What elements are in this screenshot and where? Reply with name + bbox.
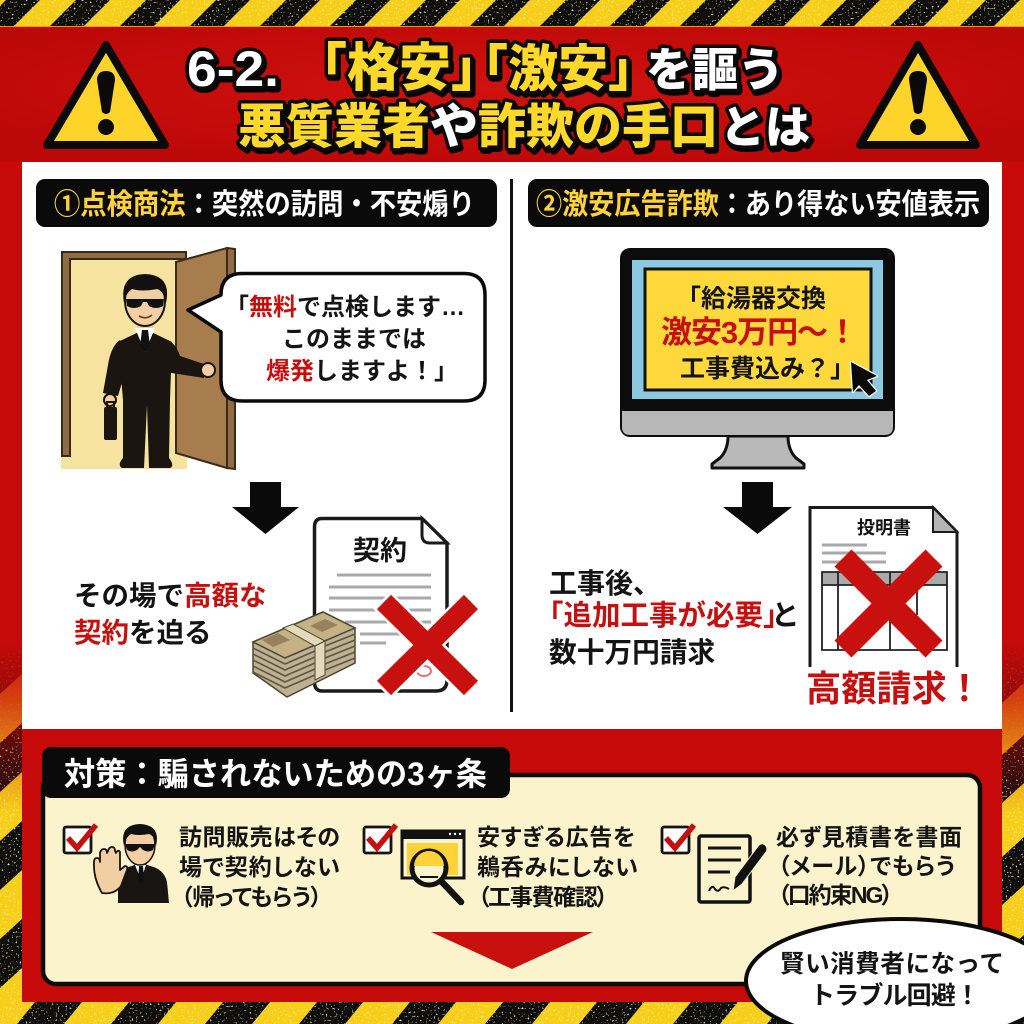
text: extra work billing: 数十万円請求 (549, 637, 715, 668)
icon: browser and magnifier (401, 830, 465, 902)
text: tip 2: （工事費確認） (478, 884, 608, 910)
title: や (430, 101, 478, 154)
tip 1: refuse door-to-door (64, 824, 340, 910)
text: tip 3: （メール）でもらう (778, 853, 955, 879)
text: tip 1: （帰ってもらう） (181, 884, 322, 910)
text: tip 1: 訪問販売はその (179, 824, 340, 850)
text: tip 2: 安すぎる広告を (477, 824, 635, 850)
tip 2: check cheap ads (364, 824, 638, 910)
hazard stripes: left side (0, 640, 22, 1024)
text: tip 3 (776, 824, 962, 908)
text: tip 3: 必ず見積書を書面 (776, 824, 962, 850)
text: tip 2 (477, 824, 638, 910)
text: extra work billing: 「追加工事が必要」 (535, 599, 792, 632)
icon: invoice document (810, 508, 957, 667)
icon: warning triangle right (860, 45, 976, 145)
text: extra work billing: と (771, 600, 800, 632)
text: pressure to sign: その場で高額な (74, 580, 266, 611)
arrow: red down triangle (431, 932, 593, 969)
text: high bill: 高額請求！ (806, 668, 982, 709)
icon: contract document: 契約 (353, 536, 407, 566)
panel: countermeasures (42, 747, 980, 984)
text: extra work billing (535, 568, 800, 668)
heading tab: 対策：騙されないための3ヶ条 (64, 756, 487, 792)
text: tip 3: （口約束NG） (778, 882, 893, 908)
panel body (43, 775, 980, 984)
hazard stripes: top (0, 0, 1024, 28)
text: tip 1 (179, 824, 340, 910)
heading tab (42, 747, 510, 798)
icon: invoice document: 投明書 (857, 517, 911, 538)
text: extra work billing: 工事後、 (549, 568, 661, 599)
title (187, 40, 810, 154)
icon: banknote stack (253, 612, 355, 697)
title: 「格安」 (295, 40, 503, 98)
icon: warning triangle left (47, 45, 165, 145)
title: 詐欺 (478, 101, 574, 154)
icon: contract document (314, 518, 447, 691)
icon: red X over invoice (843, 558, 934, 649)
divider (510, 179, 513, 712)
header band (0, 27, 1024, 162)
icon: document and pen (699, 836, 767, 902)
hazard stripes: bottom (0, 1002, 1024, 1024)
speech bubble: このままでは (282, 326, 426, 353)
illustration: monitor (620, 248, 895, 468)
tip 3: get written estimate (662, 824, 962, 908)
icon: red X over contract (382, 600, 473, 690)
title: とは (720, 102, 810, 153)
title: 悪質業者 (238, 101, 430, 154)
title: 6-2. (187, 41, 279, 97)
speech bubble (188, 274, 485, 401)
icon: checkbox (64, 825, 96, 853)
heading: inspection sales: ①点検商法：突然の訪問・不安煽り (54, 188, 475, 221)
illustration: salesman in sunglasses (103, 274, 215, 468)
arrow: down (232, 482, 299, 534)
text: tip 2: 鵜呑みにしない (477, 854, 638, 880)
heading: cheap ad fraud (528, 179, 989, 227)
icon: man with raised hand (94, 824, 169, 903)
illustration: monitor: 激安3万円〜！ (661, 315, 858, 350)
text: pressure to sign: 契約を迫る (74, 617, 212, 648)
icon: checkbox (364, 825, 396, 853)
title: の手口 (574, 101, 718, 154)
callout: smart consumer: トラブル回避！ (810, 981, 980, 1010)
title: を謳う (646, 44, 784, 96)
heading: inspection sales (36, 179, 497, 227)
heading: cheap ad fraud: ②激安広告詐欺：あり得ない安値表示 (536, 188, 980, 221)
arrow: down (723, 482, 792, 534)
text: tip 1: 場で契約しない (179, 854, 340, 880)
text: pressure to sign (74, 580, 266, 648)
callout: smart consumer (746, 919, 1024, 1024)
hazard stripes: right side (1002, 640, 1024, 1024)
speech bubble: 「無料で点検します… (225, 294, 465, 321)
speech bubble: 爆発しますよ！」 (266, 358, 458, 385)
illustration: monitor: 「給湯器交換 (676, 285, 826, 313)
callout: smart consumer: 賢い消費者になって (780, 950, 1004, 978)
illustration: monitor: 工事費込み？」 (680, 355, 855, 383)
panel: left scam – inspection sales (36, 179, 497, 697)
title: 「激安」 (458, 41, 658, 97)
panel: right scam – cheap ad fraud (528, 179, 989, 709)
icon: checkbox (662, 825, 694, 853)
panel: white main panel (22, 162, 1002, 729)
illustration: door (61, 248, 235, 469)
